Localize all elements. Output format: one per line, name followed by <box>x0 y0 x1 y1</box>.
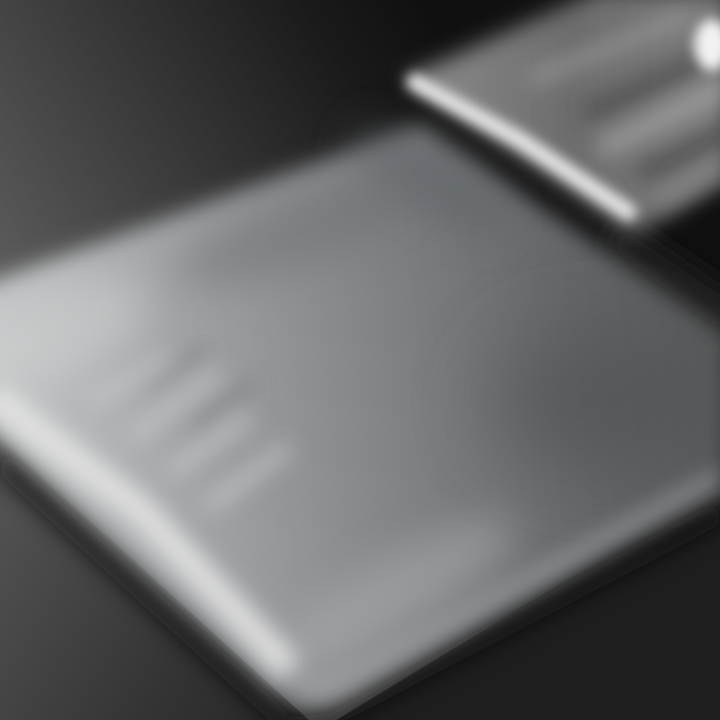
second card bright edge <box>415 82 628 212</box>
card surface shading <box>0 109 710 685</box>
second card corner highlight <box>694 19 720 71</box>
card bright lower edge <box>0 395 290 670</box>
card text stripes <box>95 350 285 505</box>
panel: second card, top right <box>405 0 720 232</box>
shadow under main card <box>0 445 720 720</box>
second card stripes <box>530 15 720 205</box>
